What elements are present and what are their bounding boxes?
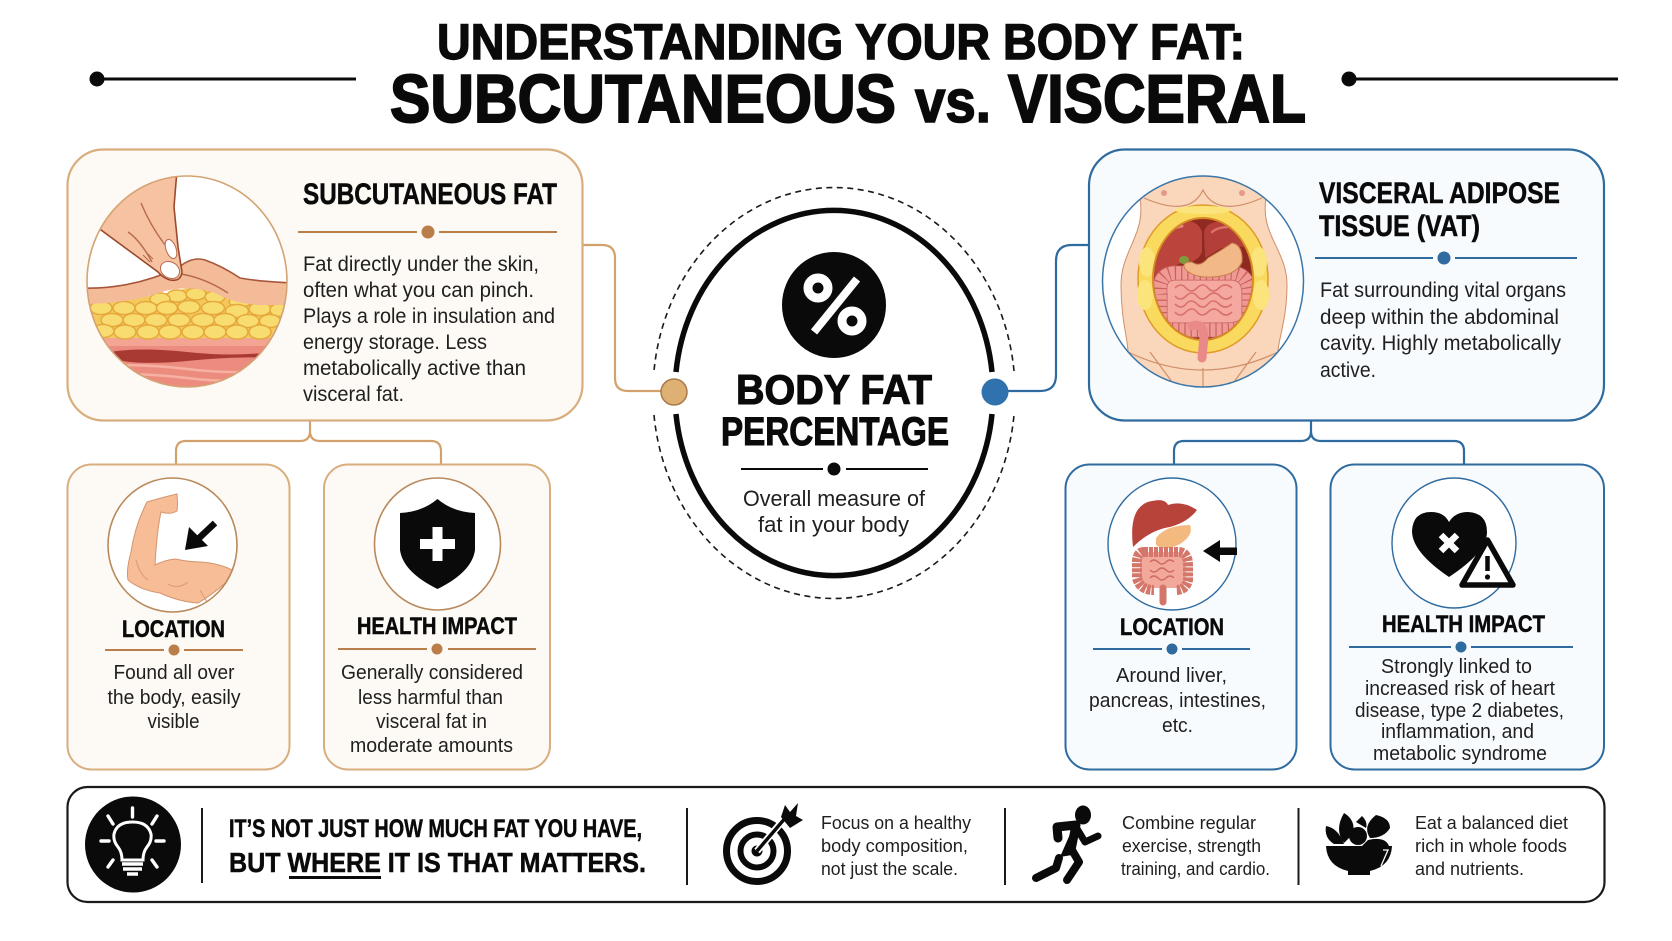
description [341,662,523,757]
card: visceral location [1066,464,1296,770]
tip: nutrition: rich in whole foods [1415,836,1567,856]
dashed outer ring [654,188,1014,598]
description: Strongly linked to [1381,656,1532,678]
connector: subcutaneous to centre [583,245,662,391]
divider [105,644,243,656]
tip: composition [821,813,971,879]
tip: exercise [1121,813,1270,879]
heading: TISSUE (VAT) [1319,210,1480,243]
body text: Fat surrounding vital organs [1320,279,1566,302]
tip: composition: not just the scale. [821,859,958,879]
title: SUBCUTANEOUS [390,61,896,137]
icon: flexed arm with arrow [108,478,237,612]
label: HEALTH IMPACT [357,613,517,640]
icon: heart with warning triangle [1392,478,1516,608]
icon: organs with arrow [1108,478,1237,610]
panel: visceral adipose tissue [1089,150,1604,420]
icon: light bulb [85,796,181,892]
icon: shield with cross [374,478,500,610]
centre description: Overall measure of [743,486,926,511]
connector node: blue [982,378,1008,406]
tip: composition: body composition, [821,836,968,856]
illustration: abdominal cavity [1102,170,1304,395]
description: etc. [1162,715,1193,737]
heading [1319,177,1560,243]
icon: percent badge [782,252,886,358]
body text [1320,279,1566,382]
body text: Fat directly under the skin, [303,253,539,276]
centre: body fat percentage [654,188,1014,598]
tip: exercise: exercise, strength [1122,836,1261,856]
connector node: tan [661,379,687,405]
tip: composition: Focus on a healthy [821,813,971,833]
description: visible [148,711,200,733]
card: visceral health impact [1330,464,1604,770]
icon: salad bowl [1326,813,1392,875]
description: less harmful than [358,687,503,709]
tip: nutrition: and nutrients. [1415,859,1524,879]
centre heading: PERCENTAGE [721,410,949,454]
description: inflammation, and [1381,721,1534,743]
body text: deep within the abdominal [1320,306,1559,329]
centre heading [721,366,949,454]
divider [1349,642,1573,652]
description: visceral fat in [376,711,487,733]
centre description [743,486,926,537]
description: Generally considered [341,662,523,684]
body text: often what you can pinch. [303,279,534,302]
solid inner ring [676,210,992,576]
body text: Plays a role in insulation and [303,305,555,328]
body text [303,253,555,406]
connector: subcutaneous to cards [176,421,441,464]
description: metabolic syndrome [1373,743,1547,765]
divider [338,644,536,654]
tip: nutrition [1415,813,1568,879]
title rule right [1342,72,1618,86]
title [390,14,1306,137]
description [1355,656,1564,765]
centre description: fat in your body [758,512,909,537]
description [1089,665,1266,737]
centre divider [741,462,928,476]
bottom takeaway bar [68,787,1604,902]
card: subcutaneous location [68,464,290,770]
divider [298,226,557,238]
title: vs. [915,68,991,135]
body text: active. [1320,359,1376,382]
description: the body, easily [108,687,240,709]
divider [1315,252,1577,264]
message: BUT WHERE IT IS THAT MATTERS. [229,847,646,878]
message: IT’S NOT JUST HOW MUCH FAT YOU HAVE, [229,815,642,843]
card: subcutaneous health impact [324,464,550,770]
label: HEALTH IMPACT [1382,611,1545,638]
description: Around liver, [1116,665,1227,687]
tip: nutrition: Eat a balanced diet [1415,813,1568,833]
description: moderate amounts [350,735,513,757]
description [108,662,240,733]
body text: cavity. Highly metabolically [1320,332,1561,355]
body text: visceral fat. [303,383,404,406]
icon: target with arrow [726,803,803,882]
description: disease, type 2 diabetes, [1355,700,1564,722]
tip: exercise: Combine regular [1122,813,1256,833]
connector: visceral to cards [1174,421,1464,464]
heading: VISCERAL ADIPOSE [1319,177,1560,210]
illustration: pinched skin and fat layer [80,170,295,390]
panel: subcutaneous fat [68,150,582,420]
message [229,815,646,879]
heading: SUBCUTANEOUS FAT [303,178,557,211]
icon: runner [1036,806,1098,880]
tip: exercise: training, and cardio. [1121,859,1270,879]
body text: metabolically active than [303,357,526,380]
body text: energy storage. Less [303,331,487,354]
title rule left [90,72,356,86]
divider [1093,644,1250,654]
connector: visceral to centre [1008,245,1088,391]
description: pancreas, intestines, [1089,690,1266,712]
label: LOCATION [1120,614,1224,641]
description: Found all over [114,662,235,684]
label: LOCATION [122,616,225,643]
title: UNDERSTANDING YOUR BODY FAT: [437,14,1245,70]
description: increased risk of heart [1365,678,1555,700]
title: VISCERAL [1008,61,1306,137]
centre heading: BODY FAT [736,366,932,413]
